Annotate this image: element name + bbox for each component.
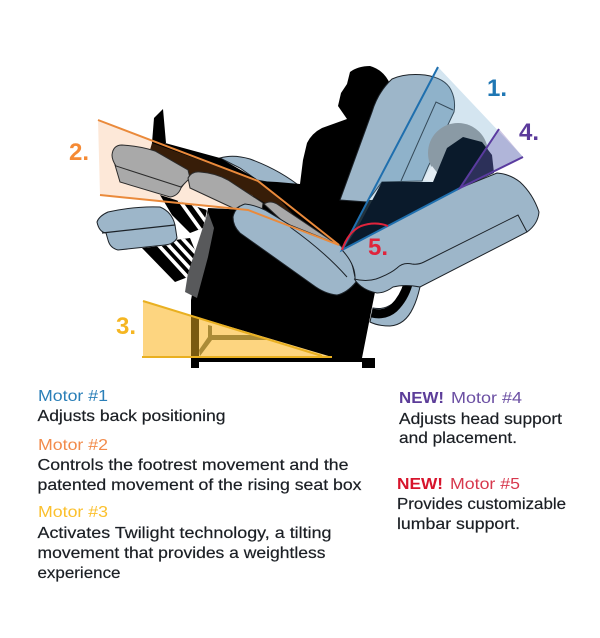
motor 5 arc <box>342 224 388 250</box>
number 4: 4. <box>519 119 539 146</box>
motor 4 lines <box>460 129 523 188</box>
reclined navy person <box>343 137 494 250</box>
motor 1 description <box>38 388 226 425</box>
number 1: 1. <box>487 75 507 102</box>
base frame seen through wedge <box>191 316 272 358</box>
motor 4 description: Motor #4 <box>451 390 522 407</box>
number 5: 5. <box>368 234 388 261</box>
motor 3 tilt wedge <box>143 301 332 357</box>
large seat cushion <box>342 173 539 293</box>
motor 3 lines <box>142 301 332 357</box>
number 3: 3. <box>116 313 136 340</box>
motor 3 description: movement that provides a weightless <box>38 545 326 562</box>
motor 2 footrest range wedge <box>98 120 339 245</box>
motor 2 description: Controls the footrest movement and the <box>38 457 349 474</box>
reclined back cushion <box>340 74 455 202</box>
footrest mechanism stripes lower <box>142 238 196 282</box>
motor 4 description: and placement. <box>399 430 517 447</box>
arm support tube <box>370 282 420 326</box>
chair diagram <box>69 66 539 368</box>
motor 3 description: experience <box>38 565 121 582</box>
footrest upper cushion <box>112 145 190 187</box>
footrest middle cushion <box>188 172 263 210</box>
motor 4 description: Adjusts head support <box>399 411 563 428</box>
motor 1 description: Motor #1 <box>38 388 108 405</box>
brown band under footrest line <box>150 143 300 222</box>
motor 1 description: Adjusts back positioning <box>38 408 226 425</box>
motor 5 description: lumbar support. <box>397 516 520 533</box>
central leg cushion <box>233 204 356 295</box>
motor 5 description: NEW! <box>397 476 443 493</box>
motor 3 description: Activates Twilight technology, a tilting <box>38 525 332 542</box>
footrest end cushion <box>264 202 338 245</box>
motor 1 range wedge <box>342 67 523 250</box>
motor 2 lines <box>98 120 339 245</box>
motor 3 description <box>38 504 332 582</box>
blue arm behind the person <box>220 156 302 188</box>
dark grey side panel <box>185 212 214 298</box>
left armrest cushion <box>97 207 177 250</box>
motor 4 description: NEW! <box>399 390 444 407</box>
footrest post <box>152 109 166 143</box>
black sliver above footrest line <box>152 140 258 182</box>
footrest lower cushion <box>115 165 190 197</box>
motor 2 description: patented movement of the rising seat box <box>38 477 362 494</box>
white collar <box>423 166 439 182</box>
head shadow <box>428 123 488 183</box>
motor 1 lines <box>342 67 460 250</box>
motor 5 description <box>397 476 566 533</box>
motor 4 range wedge <box>460 129 523 188</box>
motor 5 description: Provides customizable <box>397 496 566 513</box>
motor 4 description <box>399 390 563 447</box>
number 2: 2. <box>69 139 89 166</box>
footrest mechanism stripes upper <box>160 195 207 233</box>
black chair body and seated silhouette <box>191 66 400 368</box>
motor 5 description: Motor #5 <box>450 476 520 493</box>
seat cushion inner line <box>354 215 527 280</box>
motor 3 description: Motor #3 <box>38 504 108 521</box>
motor 2 description <box>38 437 362 494</box>
inner back panel <box>401 102 453 181</box>
motor 2 description: Motor #2 <box>38 437 108 454</box>
